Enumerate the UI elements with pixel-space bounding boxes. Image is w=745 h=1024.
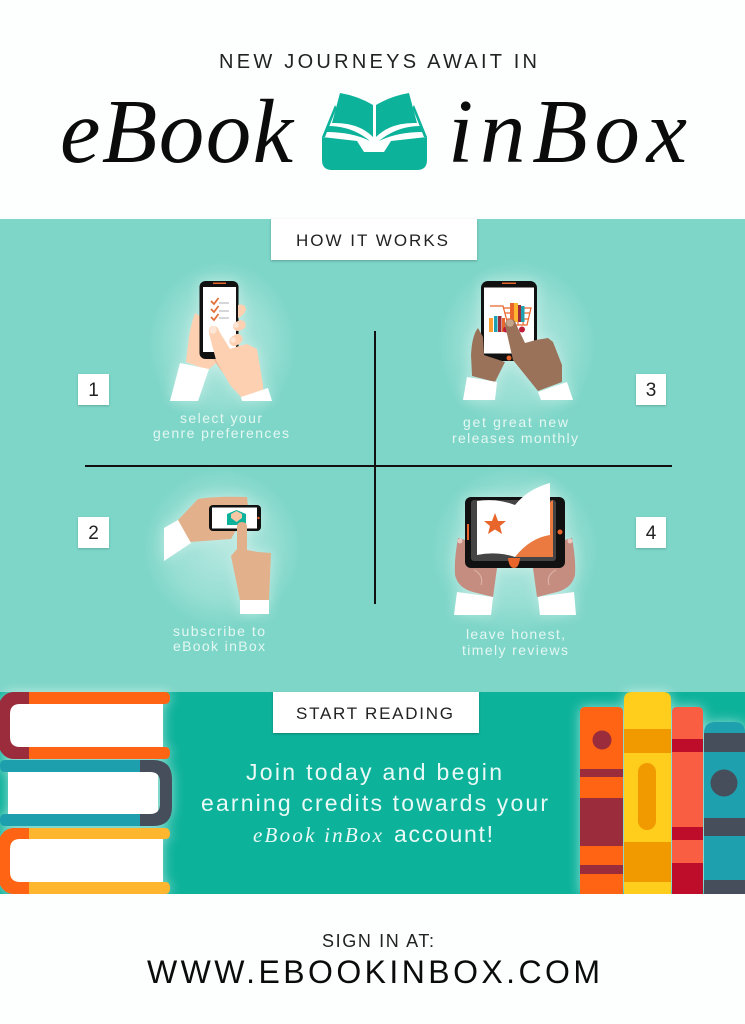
step 4 number: 4: [646, 523, 657, 544]
step 3 caption: releases monthly: [452, 430, 578, 446]
book: coral spine: [672, 707, 703, 894]
header: [60, 51, 687, 182]
step 1 caption: select your: [180, 410, 262, 426]
step 2 caption: eBook inBox: [173, 638, 265, 654]
footer: [147, 931, 600, 990]
step 1 illustration: hand and phone checklist: [170, 281, 272, 401]
step 4 caption: leave honest,: [466, 626, 565, 642]
step 1 number: 1: [88, 380, 99, 401]
heading tab: start reading: START READING: [296, 704, 453, 723]
website url: WWW.EBOOKINBOX.COM: [147, 954, 600, 990]
step 3 number: [636, 374, 666, 405]
book: orange spine: [580, 707, 623, 894]
step 3 number: 3: [646, 380, 656, 401]
panel: how it works: [0, 219, 745, 692]
call to action text: [201, 759, 548, 847]
sign in label: SIGN IN AT:: [322, 931, 434, 951]
heading tab: start reading: [273, 692, 479, 733]
step 2 caption: subscribe to: [173, 623, 265, 639]
call to action text: Join today and begin: [246, 759, 502, 785]
step 3 caption: get great new: [463, 414, 569, 430]
step 1 caption: [153, 410, 289, 441]
step 2 caption: [173, 623, 265, 654]
step 4 illustration: hands holding tablet with book: [454, 483, 576, 615]
title: eBook: eBook: [60, 81, 295, 182]
panel: start reading: [0, 692, 745, 894]
title: inBox: inBox: [448, 81, 687, 182]
call to action text: earning credits towards your: [201, 790, 548, 816]
step 2 number: [78, 517, 109, 548]
step 4 caption: [462, 626, 568, 658]
step 3 caption: [452, 414, 578, 446]
book: teal and slate: [0, 760, 172, 826]
quadrant cross divider: [85, 331, 672, 604]
step 2 number: 2: [88, 523, 99, 544]
book: teal spine: [704, 722, 745, 894]
step 2 illustration: hands and phone with envelope: [164, 497, 271, 614]
heading tab: how it works: [271, 219, 477, 260]
book: red and orange: [0, 692, 170, 759]
icon: stacked books: [0, 692, 172, 894]
call to action text: account!: [394, 821, 493, 847]
step 3 illustration: hands and phone with cart: [463, 281, 573, 400]
call to action text: eBook inBox: [253, 823, 383, 847]
heading tab: how it works: HOW IT WORKS: [296, 231, 448, 250]
book: orange and yellow: [0, 828, 170, 894]
icon: book in tray logo: [322, 93, 427, 170]
step 1 caption: genre preferences: [153, 425, 289, 441]
tagline: NEW JOURNEYS AWAIT IN: [219, 51, 537, 73]
step 1 number: [78, 374, 109, 405]
step 4 caption: timely reviews: [462, 642, 568, 658]
book: yellow spine: [624, 692, 671, 894]
step 4 number: [636, 517, 666, 548]
icon: upright books: [580, 692, 745, 894]
